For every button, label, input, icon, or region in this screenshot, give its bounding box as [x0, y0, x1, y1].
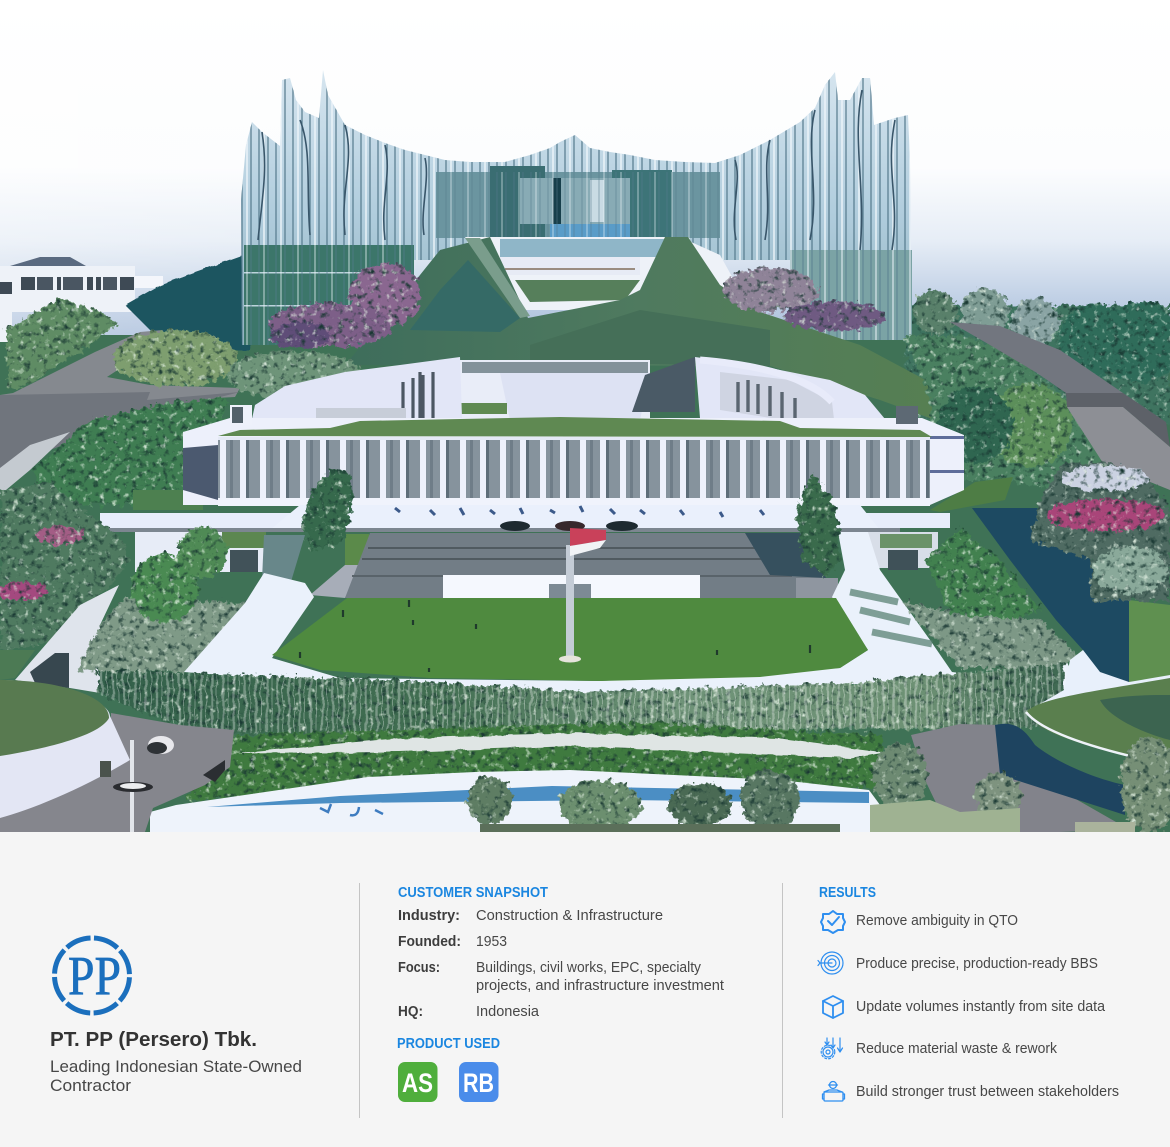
dark hillside behind palace: [125, 255, 250, 350]
hero photo: palace aerial view: [0, 0, 1170, 833]
icon: gear and down arrows: [821, 1038, 842, 1059]
lower glass left: [244, 245, 414, 345]
flowers left: [268, 263, 421, 348]
right flower bed: [1030, 462, 1170, 600]
right tree front: [925, 528, 1040, 625]
company description: [50, 1057, 302, 1095]
left circular lawn and road: [0, 680, 234, 832]
right lawn upper: [1129, 600, 1170, 685]
row: focus: Focus:: [398, 960, 440, 976]
right garden terraces: [900, 600, 1078, 668]
icon: AS product: [398, 1062, 438, 1102]
company block: [50, 938, 302, 1095]
plaza: [100, 505, 950, 532]
icon: worker with sign: [822, 1082, 844, 1101]
white walkways: [184, 532, 1080, 700]
left planted garden: [77, 597, 245, 672]
icon: PP company logo: [54, 938, 130, 1013]
foreground pale hedge: [480, 800, 1135, 832]
rear central terrace: [455, 357, 695, 420]
row: industry: Industry:: [398, 908, 460, 924]
sky: [0, 0, 1170, 335]
result: reduce waste: Reduce material waste & rework: [856, 1041, 1058, 1057]
icon: AS product: AS: [402, 1068, 433, 1098]
left foliage top: [6, 298, 118, 390]
row: focus: projects, and infrastructure investment: [476, 978, 724, 994]
right roadway: [950, 322, 1170, 490]
icon: PP company logo: PP: [68, 945, 121, 1006]
grand stairs: [345, 533, 838, 604]
right grass slope: [930, 477, 1013, 512]
row: founded: [398, 934, 507, 950]
right circular lawn and road: [911, 650, 1170, 832]
foreground shrubs: [468, 737, 1170, 833]
facade centre block: [436, 172, 720, 238]
side terraces: [135, 530, 938, 598]
company name: PT. PP (Persero) Tbk.: [50, 1028, 257, 1051]
right crescent wing: [695, 357, 890, 428]
right foliage mass: [905, 335, 1105, 490]
lower glass right: [790, 250, 912, 340]
results block: [818, 885, 1119, 1101]
result: precise BBS: [818, 952, 1098, 974]
left tree cluster: [33, 397, 227, 505]
row: headquarters: HQ:: [398, 1004, 423, 1020]
glass palace facade: [241, 70, 912, 345]
footer panel: [0, 832, 1170, 1147]
left lawn patch: [133, 490, 203, 510]
company description: Contractor: [50, 1076, 131, 1095]
row: industry: Construction & Infrastructure: [476, 908, 663, 924]
company description: Leading Indonesian State-Owned: [50, 1057, 302, 1076]
row: headquarters: Indonesia: [476, 1004, 540, 1020]
row: focus: Buildings, civil works, EPC, specialty: [476, 960, 702, 976]
central terrace between slopes: [465, 237, 745, 310]
left garden arch: [0, 585, 119, 693]
flowers right: [722, 268, 885, 331]
reflecting pool: [150, 770, 900, 832]
result: update volumes: [823, 996, 1106, 1018]
result: update volumes: Update volumes instantly from site data: [856, 999, 1106, 1015]
left foliage and flowers: [0, 483, 130, 652]
result: stakeholder trust: Build stronger trust between stakeholders: [856, 1084, 1119, 1100]
left white building: [0, 257, 163, 342]
hedge band: [97, 663, 1066, 733]
lower planted terraces: [184, 722, 884, 800]
left tree front: [131, 527, 228, 622]
result: remove ambiguity: Remove ambiguity in QTO: [856, 913, 1018, 929]
foliage behind left rotunda: [113, 330, 363, 399]
row: focus: [398, 960, 724, 994]
icon: cube: [823, 996, 843, 1018]
column dividers: [360, 883, 782, 1118]
result: reduce waste: [821, 1038, 1058, 1059]
icon: verified badge: [821, 911, 845, 933]
branch-like mullions: [258, 90, 895, 250]
row: founded: 1953: [476, 934, 507, 950]
heading: product used: PRODUCT USED: [397, 1036, 500, 1052]
heading: customer snapshot: CUSTOMER SNAPSHOT: [398, 885, 548, 901]
green hill: [345, 237, 935, 420]
left crescent wing: [250, 357, 462, 428]
row: headquarters: [398, 1004, 540, 1020]
lawn figures: [300, 600, 810, 672]
tree flanking left entrance: [302, 470, 352, 550]
result: remove ambiguity: [821, 911, 1018, 933]
customer snapshot block: [397, 885, 724, 1102]
main building colonnade: [183, 405, 964, 506]
icon: RB product: RB: [463, 1068, 494, 1098]
result: precise BBS: Produce precise, production-ready BBS: [856, 956, 1098, 972]
row: founded: Founded:: [398, 934, 461, 950]
heading: results: RESULTS: [819, 885, 876, 901]
flagpole and flag: [559, 528, 606, 662]
tree flanking right entrance: [796, 473, 840, 577]
left roads: [0, 330, 240, 495]
central lawn: [272, 598, 868, 681]
icon: target: [818, 952, 843, 974]
row: industry: [398, 908, 663, 924]
right dark channel: [972, 508, 1129, 682]
distant trees right: [905, 288, 1170, 425]
icon: RB product: [459, 1062, 498, 1102]
